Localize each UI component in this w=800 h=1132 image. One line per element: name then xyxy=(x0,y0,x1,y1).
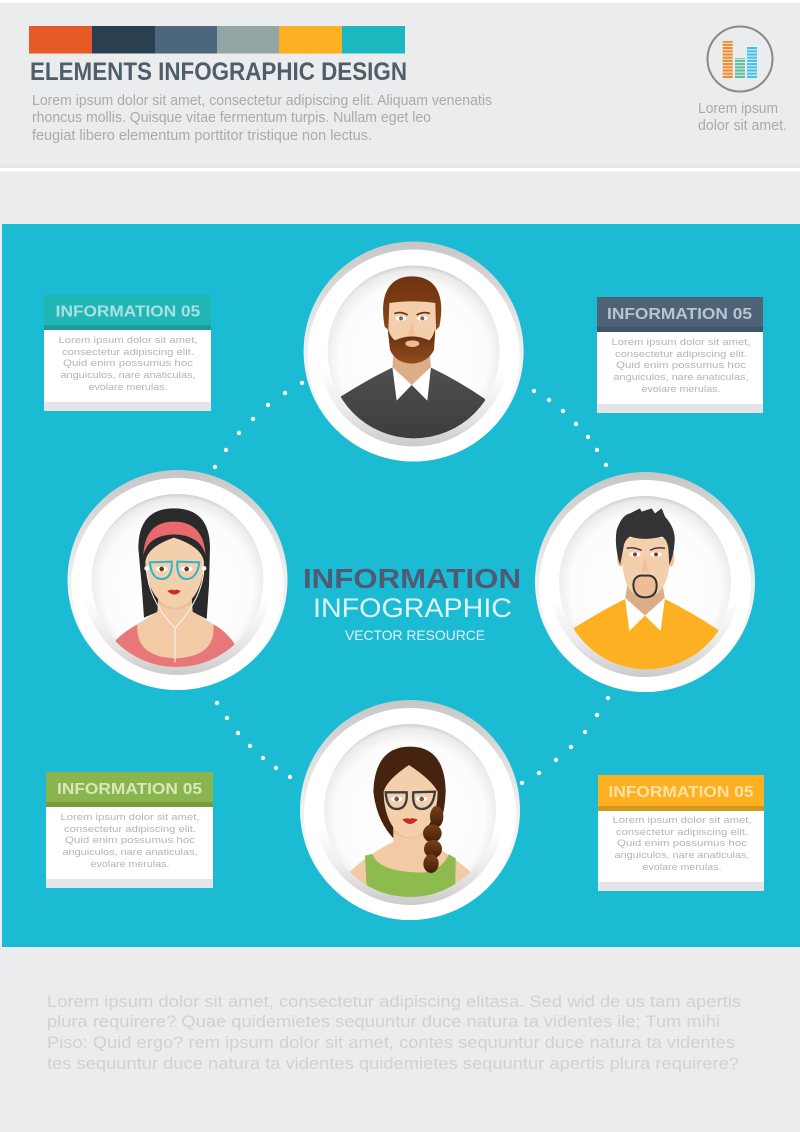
info box: orange: Lorem ipsum dolor sit amet, xyxy=(612,815,752,826)
avatar: goatee man xyxy=(572,508,720,678)
avatar: woman with headband xyxy=(113,508,237,678)
centre heading: INFORMATION xyxy=(303,563,521,594)
colour bar xyxy=(29,26,405,54)
portrait ring: bearded man xyxy=(304,242,524,462)
footer paragraph: Lorem ipsum dolor sit amet, consectetur adipiscing elitasa. Sed wid de us tam apertis xyxy=(47,993,741,1011)
info box: green: Lorem ipsum dolor sit amet, xyxy=(60,812,200,823)
info box: teal: consectetur adipiscing elit. xyxy=(62,347,194,358)
info box: green: Quid enim possumus hoc xyxy=(65,835,195,846)
info box: green: consectetur adipiscing elit. xyxy=(64,824,196,835)
info box: green: anguiculos, nare anaticulas, xyxy=(62,847,198,858)
avatar: bearded man xyxy=(340,276,487,448)
info box: slate: anguiculos, nare anaticulas, xyxy=(614,372,748,383)
info box: orange: INFORMATION 05 xyxy=(608,784,754,801)
avatar: woman with braid xyxy=(350,747,470,908)
info box: teal: evolare merulas. xyxy=(88,382,168,393)
centre heading xyxy=(303,563,521,643)
header description: feugiat libero elementum porttitor tristique non lectus. xyxy=(32,128,372,144)
info box: teal: Lorem ipsum dolor sit amet, xyxy=(58,335,198,346)
info box: teal: anguiculos, nare anaticulas, xyxy=(60,370,196,381)
info box: slate: INFORMATION 05 xyxy=(607,306,752,323)
icon caption xyxy=(698,101,787,134)
info box: orange: evolare merulas. xyxy=(642,862,722,873)
main blue panel xyxy=(2,224,800,947)
info box: slate: evolare merulas. xyxy=(642,384,720,395)
centre heading: INFOGRAPHIC xyxy=(313,593,512,623)
info box: slate: consectetur adipiscing elit. xyxy=(615,349,747,360)
footer paragraph: plura requirere? Quae quidemietes sequuntur duce natura ta videntes ile; Tum mihi xyxy=(47,1013,720,1031)
info box: teal: INFORMATION 05 xyxy=(56,304,201,320)
info box: green xyxy=(46,772,213,888)
footer paragraph xyxy=(47,993,741,1073)
centre heading: VECTOR RESOURCE xyxy=(345,627,485,643)
info box: slate: Lorem ipsum dolor sit amet, xyxy=(612,337,750,348)
info box: orange: consectetur adipiscing elit. xyxy=(616,827,748,838)
icon caption: dolor sit amet. xyxy=(698,118,787,134)
info box: orange: Quid enim possumus hoc xyxy=(617,838,747,849)
info box: orange: anguiculos, nare anaticulas, xyxy=(614,850,750,861)
icon: equalizer badge xyxy=(708,26,772,92)
header description xyxy=(32,93,492,144)
info box: green: evolare merulas. xyxy=(90,859,170,870)
dotted connectors xyxy=(213,381,610,785)
info box: slate xyxy=(597,297,763,413)
info box: orange xyxy=(598,775,764,891)
header description: rhoncus mollis. Quisque vitae fermentum turpis. Nullam eget leo xyxy=(32,110,431,126)
info box: slate: Quid enim possumus hoc xyxy=(616,360,746,371)
header description: Lorem ipsum dolor sit amet, consectetur adipiscing elit. Aliquam venenatis xyxy=(32,93,492,109)
portrait ring: goatee man xyxy=(535,472,755,692)
portrait ring: woman with braid xyxy=(300,700,520,920)
footer paragraph: tes sequuntur duce natura ta videntes quidemietes sequuntur apertis plura requirere? xyxy=(47,1055,739,1073)
info box: green: INFORMATION 05 xyxy=(57,781,202,798)
info box: teal xyxy=(44,295,211,411)
info box: teal: Quid enim possumus hoc xyxy=(63,358,193,369)
footer paragraph: Piso: Quid ergo? rem ipsum dolor sit amet, contes sequuntur duce natura ta videntes xyxy=(47,1034,735,1052)
title: ELEMENTS INFOGRAPHIC DESIGN xyxy=(30,58,407,86)
portrait ring: woman with headband xyxy=(68,470,288,690)
icon caption: Lorem ipsum xyxy=(698,101,778,117)
